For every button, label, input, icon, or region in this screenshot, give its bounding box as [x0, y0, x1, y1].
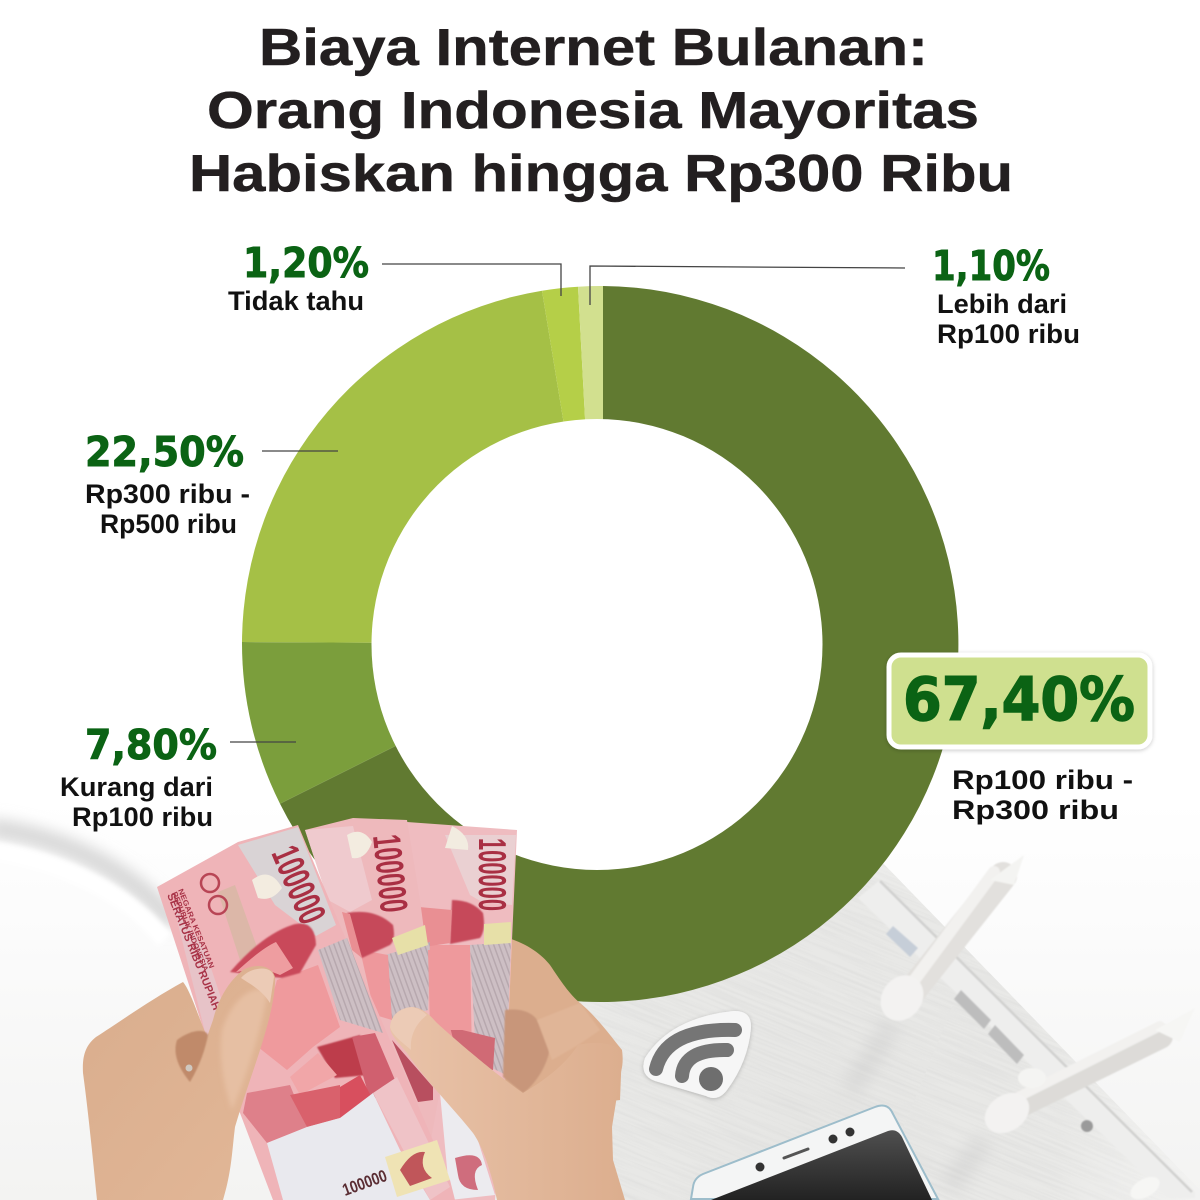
label: 7,80% [60, 721, 217, 832]
banknote one: 100000 [340, 1166, 390, 1200]
label: 22,50%: 22,50% [85, 428, 244, 476]
banknote three [305, 818, 462, 1102]
callout: 67,40%: 67,40% [903, 665, 1135, 735]
segment: Lebih dari Rp100 ribu 1,10% [578, 286, 603, 644]
label: 1,20% Tidak tahu: 1,20% [243, 239, 369, 287]
face two [317, 1035, 368, 1078]
label: 1,10% Lebih dari Rp100 ribu [932, 242, 1080, 349]
white cable on the left [0, 828, 175, 940]
leader line: Lebih dari [590, 266, 905, 305]
leader line: 7,80% [230, 741, 296, 743]
label: 1,10% Lebih dari Rp100 ribu: Lebih dari [937, 289, 1067, 319]
segment: Tidak tahu 1,20% [542, 287, 600, 644]
banknote one: NEGARA KESATUAN [176, 887, 216, 970]
banknote value: 100000 [470, 838, 513, 911]
donut hole [372, 419, 822, 870]
thumb highlight [221, 989, 268, 1110]
label: 22,50% [85, 428, 250, 539]
label: 1,20% Tidak tahu [228, 239, 369, 316]
icon: phone [691, 1106, 938, 1200]
left hand [83, 966, 275, 1200]
title: Habiskan hingga Rp300 Ribu [189, 145, 1013, 203]
table surface [0, 1056, 1200, 1200]
banknote value: 100000 [263, 840, 334, 930]
finger pocket shadow [175, 1031, 208, 1082]
router body [858, 880, 1195, 1198]
label: 7,80%: Kurang dari [60, 772, 213, 802]
right thumb nail [390, 1007, 427, 1050]
label: Rp100 ribu - Rp300 ribu [952, 765, 1133, 825]
banknote four [407, 822, 517, 1200]
label: 22,50%: Rp300 ribu - [85, 479, 250, 509]
banknote value: 100000 [364, 832, 415, 915]
finger pocket [503, 1009, 550, 1093]
antenna two [985, 1022, 1173, 1198]
label: Rp100 ribu - Rp300 ribu: Rp100 ribu - [952, 765, 1133, 795]
palm and thumb [390, 1007, 625, 1200]
left thumb nail [241, 968, 274, 1003]
segment: Rp100 ribu - Rp300 ribu 67,40% [280, 286, 958, 1002]
label: Rp100 ribu - Rp300 ribu: Rp300 ribu [952, 795, 1119, 825]
note left panel [218, 885, 258, 960]
right hand [390, 1003, 625, 1200]
donut chart [242, 286, 958, 1002]
right hand back fingers [500, 938, 622, 1110]
antenna one [881, 858, 1022, 1020]
label: 1,10% Lebih dari Rp100 ribu: 1,10% [932, 242, 1050, 290]
photo: hands holding rupiah banknotes [83, 818, 625, 1200]
banknote small print: SERATUS RIBU RUPIAH [164, 892, 222, 1012]
national emblem [385, 1140, 450, 1197]
label: 1,10% Lebih dari Rp100 ribu: Rp100 ribu [937, 319, 1080, 349]
label: 7,80%: 7,80% [85, 721, 217, 769]
antenna shadows [850, 1025, 985, 1185]
segment: Kurang dari Rp100 ribu 7,80% [242, 642, 600, 804]
label: 22,50%: Rp500 ribu [100, 509, 237, 539]
shoulders [243, 1085, 307, 1143]
label: 7,80%: Rp100 ribu [72, 802, 213, 832]
title [189, 19, 1013, 203]
banknote one [157, 825, 455, 1200]
label: 1,20% Tidak tahu: Tidak tahu [228, 286, 364, 316]
title: Orang Indonesia Mayoritas [207, 82, 979, 140]
leader line: Tidak tahu [382, 264, 561, 296]
note white section [267, 1093, 430, 1200]
icon: wifi sticker [643, 1011, 751, 1098]
face one [230, 924, 316, 978]
title: Biaya Internet Bulanan: [259, 19, 928, 77]
note stripes [318, 938, 383, 1033]
photo background: table and router [0, 800, 1200, 1200]
note pink band [258, 965, 340, 1070]
banknote one: REPUBLIK INDONESIA [170, 890, 211, 973]
leader line: 22,50% [262, 450, 338, 452]
segment: Rp300 ribu - Rp500 ribu 22,50% [242, 291, 600, 644]
